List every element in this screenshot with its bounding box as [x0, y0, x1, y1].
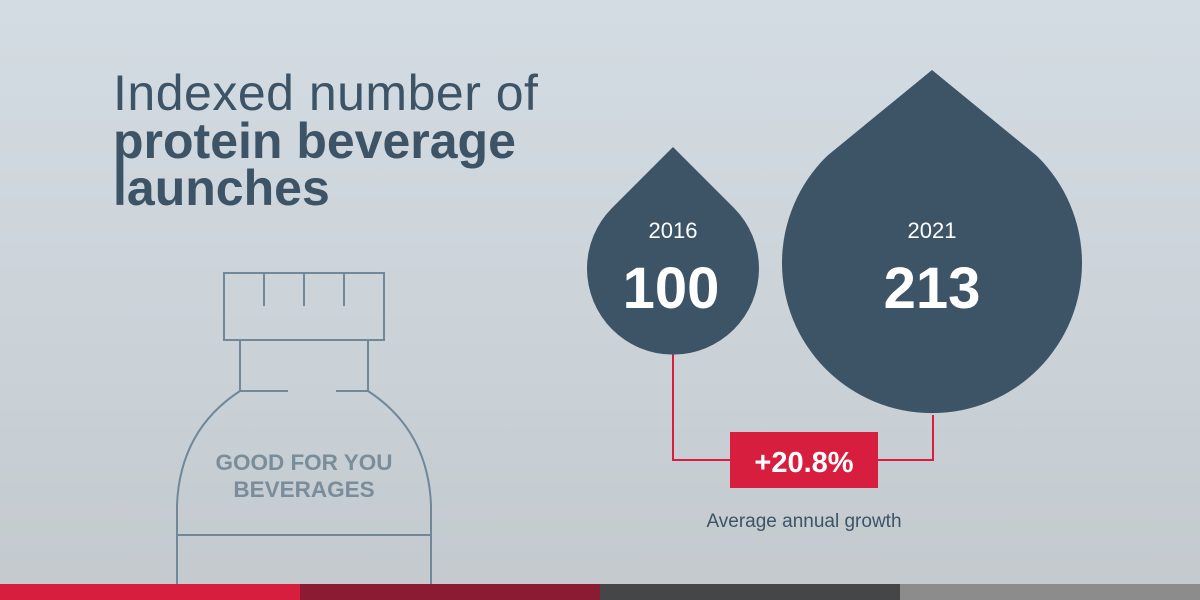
drop 2021: [782, 70, 1082, 413]
title: Indexed number of: [113, 65, 538, 121]
growth badge: [730, 432, 878, 488]
caption: Average annual growth: [706, 511, 902, 532]
title: protein beverage: [113, 112, 516, 168]
bottle label: [215, 450, 393, 502]
drop 2016: 100: [623, 256, 719, 321]
drop 2021: 213: [884, 256, 980, 321]
bottle label: BEVERAGES: [233, 477, 375, 502]
title: [113, 65, 538, 216]
connector lines: [673, 350, 933, 460]
drop 2016: 2016: [649, 218, 697, 243]
bottom bar: [0, 584, 1200, 600]
title: launches: [113, 160, 330, 216]
bottle: [177, 273, 431, 584]
drop 2021: 2021: [908, 218, 956, 243]
drop 2016: [587, 147, 759, 355]
bottle label: GOOD FOR YOU: [215, 450, 393, 475]
growth badge: +20.8%: [754, 447, 854, 479]
